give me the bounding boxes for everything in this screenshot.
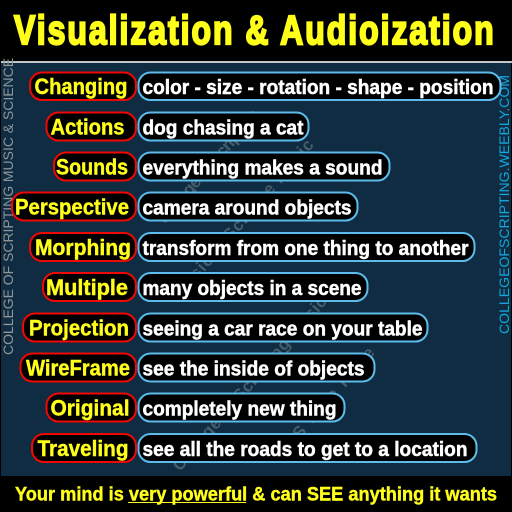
- row: Traveling: see all the roads to get to a location: [142, 438, 468, 461]
- row: Actions: [46, 112, 308, 140]
- row: Sounds: Sounds: [56, 154, 128, 180]
- row: Morphing: transform from one thing to another: [142, 237, 469, 260]
- row: Perspective: [12, 192, 358, 220]
- row: Actions: dog chasing a cat: [142, 116, 304, 140]
- row: Perspective: camera around objects: [142, 196, 352, 220]
- watermark: College of Scripting Music: [169, 289, 334, 475]
- row: Changing: color - size - rotation - shape - position: [142, 76, 494, 99]
- row: Original: completely new thing: [142, 398, 336, 420]
- row: Traveling: Traveling: [38, 436, 128, 461]
- watermark: Music & Science Music: [169, 132, 321, 303]
- title: Visualization & Audioization: [14, 7, 494, 53]
- row: WireFrame: WireFrame: [26, 356, 130, 380]
- row: Multiple: Multiple: [46, 275, 128, 300]
- row: WireFrame: [20, 354, 374, 382]
- row: Original: Original: [50, 396, 130, 420]
- row: Changing: Changing: [34, 74, 128, 99]
- row: Original: [46, 394, 344, 422]
- watermark: College of Scripting: [154, 102, 266, 228]
- side label: college name: COLLEGE OF SCRIPTING MUSIC & SCIENCE: [0, 58, 16, 355]
- row: Sounds: everything makes a sound: [142, 156, 382, 180]
- row: Sounds: [54, 152, 390, 180]
- row: Multiple: [43, 273, 368, 301]
- row: Perspective: Perspective: [15, 194, 129, 220]
- row: Morphing: [30, 233, 474, 261]
- row: Multiple: many objects in a scene: [142, 277, 362, 300]
- row: WireFrame: see the inside of objects: [142, 358, 364, 380]
- watermark: [162, 110, 374, 470]
- row: Actions: Actions: [50, 114, 124, 140]
- watermark: Science: [289, 340, 382, 443]
- row: Projection: seeing a car race on your table: [142, 318, 422, 340]
- row: Projection: [23, 314, 428, 342]
- row: Projection: Projection: [29, 316, 129, 340]
- row: Morphing: Morphing: [35, 235, 131, 260]
- row: Changing: [30, 72, 500, 100]
- side label: website: COLLEGEOFSCRIPTING.WEEBLY.COM: [496, 75, 512, 334]
- row: Traveling: [32, 434, 476, 462]
